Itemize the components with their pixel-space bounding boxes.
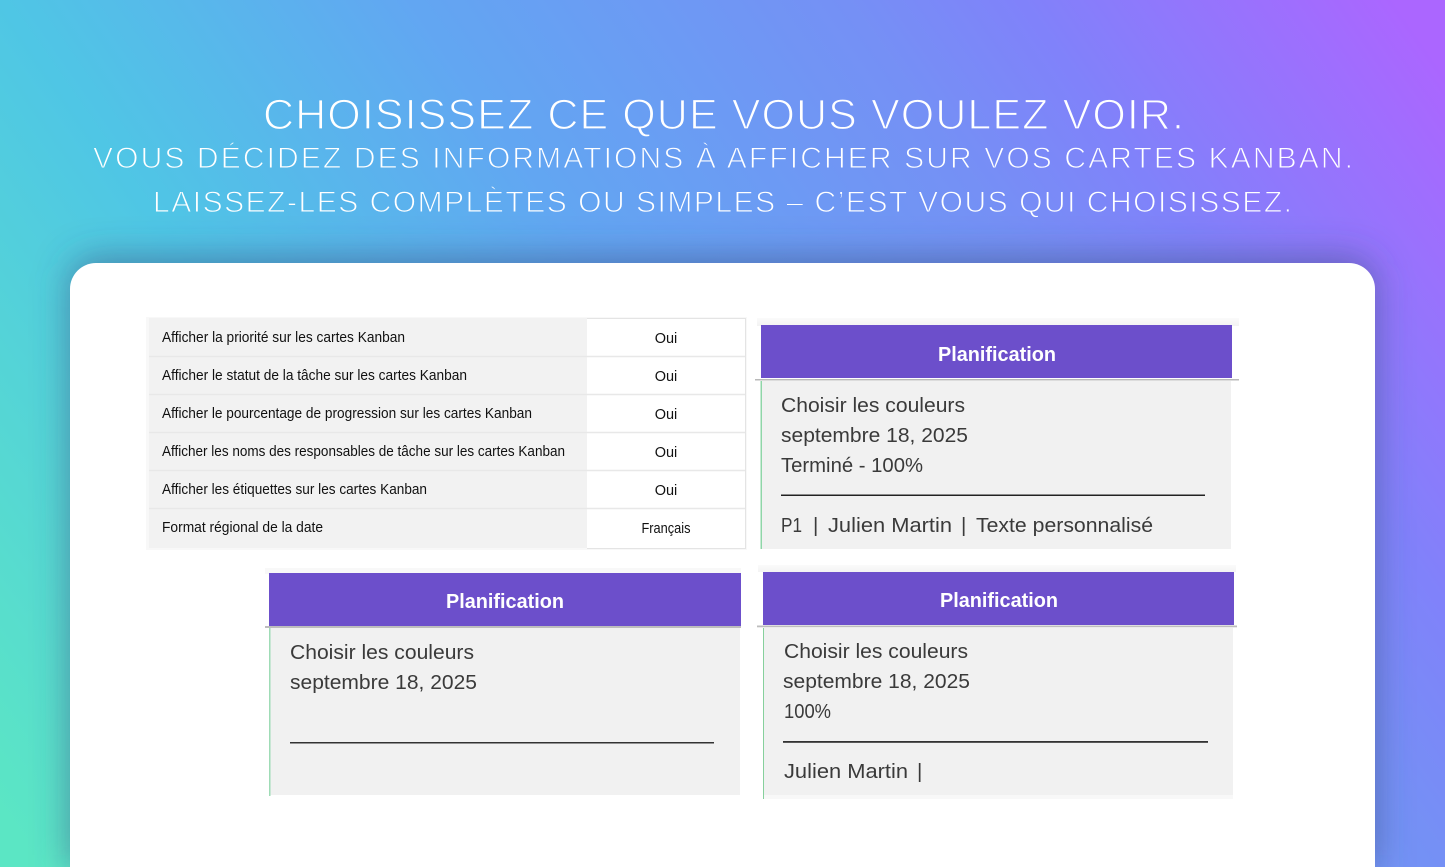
subtitle bbox=[93, 142, 1353, 219]
row: statut: Oui bbox=[655, 369, 677, 385]
row: statut: Afficher le statut de la tâche sur les cartes Kanban bbox=[162, 368, 467, 384]
kanban card: complete bbox=[755, 318, 1239, 549]
row: pourcentage: Oui bbox=[655, 407, 677, 423]
row: responsables: Afficher les noms des responsables de tâche sur les cartes Kanban bbox=[162, 444, 565, 460]
card text: Terminé - 100% bbox=[781, 454, 923, 477]
card text: Choisir les couleurs bbox=[781, 394, 965, 417]
row: étiquettes: Oui bbox=[655, 483, 677, 499]
header: Planification bbox=[940, 590, 1058, 612]
card text: | bbox=[917, 760, 922, 783]
row: format de date: Format régional de la date bbox=[162, 520, 323, 536]
row: priorité bbox=[162, 330, 677, 347]
row: priorité: Afficher la priorité sur les cartes Kanban bbox=[162, 330, 405, 346]
row: pourcentage: Afficher le pourcentage de progression sur les cartes Kanban bbox=[162, 406, 532, 422]
kanban card: percentage and owner bbox=[757, 565, 1237, 799]
card text: Choisir les couleurs bbox=[784, 640, 968, 663]
card text: 100% bbox=[784, 700, 831, 723]
header bbox=[763, 572, 1234, 625]
card text: septembre 18, 2025 bbox=[781, 424, 968, 447]
row: statut bbox=[162, 368, 677, 385]
row: format de date: Français bbox=[642, 521, 690, 537]
header: Planification bbox=[446, 591, 564, 613]
row: format de date bbox=[162, 520, 690, 537]
card text bbox=[290, 641, 714, 744]
card text: Julien Martin bbox=[828, 514, 952, 537]
title: CHOISISSEZ CE QUE VOUS VOULEZ VOIR. bbox=[263, 91, 1184, 139]
card shadow bbox=[70, 258, 1375, 867]
card text bbox=[781, 394, 1205, 537]
header bbox=[269, 573, 741, 626]
header: Planification bbox=[938, 344, 1056, 366]
row: étiquettes: Afficher les étiquettes sur les cartes Kanban bbox=[162, 482, 427, 498]
card text: P1 bbox=[781, 514, 802, 537]
kanban card: minimal bbox=[265, 568, 741, 796]
row: étiquettes bbox=[162, 482, 677, 499]
subtitle: VOUS DÉCIDEZ DES INFORMATIONS À AFFICHER SUR VOS CARTES KANBAN. bbox=[93, 142, 1353, 175]
header bbox=[761, 325, 1232, 378]
card text: Choisir les couleurs bbox=[290, 641, 474, 664]
card text: septembre 18, 2025 bbox=[783, 670, 970, 693]
card text: Texte personnalisé bbox=[976, 514, 1153, 537]
card text bbox=[783, 640, 1208, 783]
subtitle: LAISSEZ-LES COMPLÈTES OU SIMPLES – C’EST VOUS QUI CHOISISSEZ. bbox=[153, 186, 1292, 219]
panel: white card bbox=[70, 263, 1375, 867]
settings table bbox=[146, 317, 747, 550]
card text: septembre 18, 2025 bbox=[290, 671, 477, 694]
row: priorité: Oui bbox=[655, 331, 677, 347]
card text: Julien Martin bbox=[784, 760, 908, 783]
card text: | bbox=[961, 514, 966, 537]
card text: | bbox=[813, 514, 818, 537]
row: responsables: Oui bbox=[655, 445, 677, 461]
